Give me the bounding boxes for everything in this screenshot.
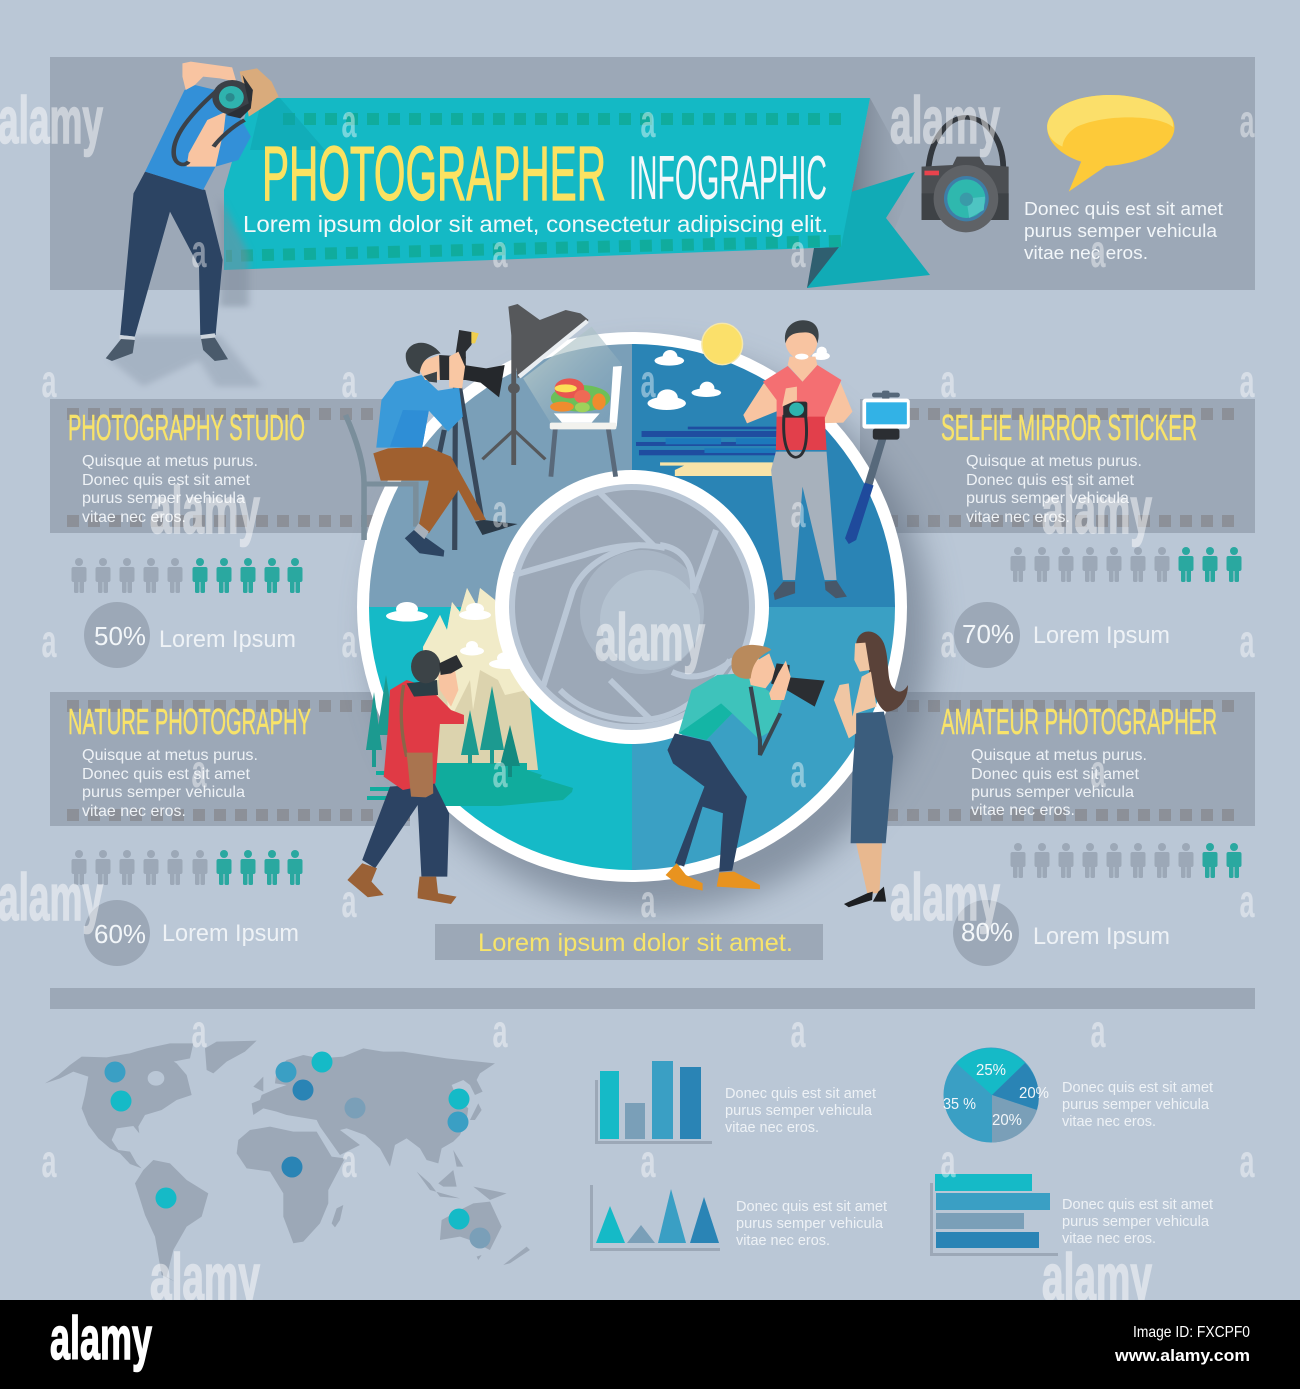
watermarks: alamy [890,83,1000,157]
section: nature photography: NATURE PHOTOGRAPHY [68,701,311,742]
section: selfie mirror sticker: Donec quis est sit amet [966,472,1135,489]
stat: 60%: 60% [94,919,146,949]
section: photography studio: Donec quis est sit amet [82,472,251,489]
stat: 50%: 50% [94,621,146,651]
watermarks: a [42,615,57,667]
icon: selfie stick with phone [845,391,910,544]
pie chart [943,1048,1049,1142]
section: photography studio: vitae nec eros. [82,509,186,526]
bar chart caption: Donec quis est sit amet [725,1086,876,1102]
pie chart: 35 % [943,1096,976,1113]
watermarks: alamy [0,83,103,157]
section: amateur photographer: Donec quis est sit amet [971,766,1140,783]
section: photography studio: Quisque at metus purus. [82,453,258,470]
watermarks: a [790,1005,806,1057]
pictogram row: 80% [1010,843,1242,878]
triangle chart caption [736,1199,887,1249]
panel: photography studio band [50,399,410,533]
panel: nature photography band [50,692,410,826]
lens aperture [495,470,769,744]
pie chart: 25% [976,1062,1006,1079]
watermarks: alamy [595,600,705,674]
pie chart caption: purus semper vehicula [1062,1097,1210,1113]
watermarks: alamy [0,860,103,934]
title: PHOTOGRAPHER [262,131,606,217]
figure: seated studio photographer [346,330,518,557]
horizontal bar chart caption: vitae nec eros. [1062,1231,1156,1247]
scene: mountains [367,588,573,806]
caption bar: Lorem ipsum dolor sit amet. [478,929,793,957]
header note: vitae nec eros. [1024,242,1148,263]
stat: 50% [84,602,296,668]
donut shadow [372,352,932,912]
triangle chart caption: vitae nec eros. [736,1233,830,1249]
triangle chart caption: Donec quis est sit amet [736,1199,887,1215]
section: nature photography: Donec quis est sit amet [82,766,251,783]
section: selfie mirror sticker [941,407,1197,526]
icon: dslr camera [922,117,1009,232]
bar chart caption [725,1086,876,1136]
section: selfie mirror sticker: Quisque at metus purus. [966,453,1142,470]
pie chart caption [1062,1080,1213,1130]
section: nature photography [68,701,311,820]
footer bar: alamy [50,1305,152,1372]
caption bar [435,924,823,960]
section: photography studio: PHOTOGRAPHY STUDIO [68,407,305,448]
bar chart [595,1061,712,1144]
header band [50,57,1255,290]
watermarks: alamy [890,860,1000,934]
horizontal bar chart caption: Donec quis est sit amet [1062,1197,1213,1213]
pictogram row: 50% [72,558,302,593]
scene: beach [636,323,830,476]
watermarks: alamy [150,1240,260,1314]
watermarks: a [640,1135,656,1187]
bar chart caption: purus semper vehicula [725,1103,873,1119]
section: photography studio [68,407,305,526]
horizontal bar chart caption: purus semper vehicula [1062,1214,1210,1230]
figure: nature photographer [347,650,464,904]
horizontal bar chart [930,1174,1058,1256]
watermarks: a [492,225,508,277]
stat: 80%: 80% [961,917,1013,947]
watermarks: a [1090,225,1106,277]
section: nature photography: purus semper vehicula [82,784,245,801]
watermarks: a [790,225,806,277]
world map [45,1041,530,1282]
bar chart caption: vitae nec eros. [725,1120,819,1136]
pictogram row: 60% [72,850,302,885]
watermarks: a [192,745,207,797]
footer bar [0,1300,1300,1389]
stat: 80% [953,900,1170,966]
figure: woman posing [834,631,908,907]
watermarks: a [790,485,806,537]
watermarks: a [1090,745,1106,797]
donut chart [357,332,907,882]
watermarks: a [1240,1135,1255,1187]
watermarks: a [342,875,357,927]
watermarks: a [492,485,508,537]
divider bar [50,988,1255,1009]
section: amateur photographer: vitae nec eros. [971,802,1075,819]
header note: purus semper vehicula [1024,220,1218,241]
header note: Donec quis est sit amet [1024,198,1223,219]
section: amateur photographer: purus semper vehicula [971,784,1134,801]
panel: selfie mirror sticker band [860,399,1255,533]
triangle chart [590,1185,720,1251]
section: selfie mirror sticker: vitae nec eros. [966,509,1070,526]
watermarks: a [342,355,357,407]
figure: selfie photographer [743,320,852,600]
pie chart: 20% [1019,1085,1049,1102]
section: nature photography: Quisque at metus purus. [82,747,258,764]
watermarks: a [640,875,656,927]
header note [1024,198,1223,263]
figure: studio set with lamp and food [482,304,622,477]
watermarks: a [790,745,806,797]
subtitle: Lorem ipsum dolor sit amet, consectetur adipiscing elit. [243,211,828,237]
footer bar: www.alamy.com [1114,1346,1250,1365]
pie chart: 20% [992,1112,1022,1129]
trees over the ring [366,675,395,767]
watermarks: alamy [1042,1240,1152,1314]
watermarks: a [192,1005,207,1057]
triangle chart caption: purus semper vehicula [736,1216,884,1232]
text: INFOGRAPHIC [629,144,827,213]
watermarks: a [342,95,357,147]
watermarks: alamy [150,473,260,547]
watermarks: a [940,355,956,407]
stat: 70%: Lorem Ipsum [1033,622,1170,649]
watermarks: alamy [1042,473,1152,547]
watermarks: a [342,1135,357,1187]
watermarks: a [640,355,656,407]
icon: sun [702,323,743,365]
stat: 60%: Lorem Ipsum [162,920,299,947]
pie chart caption: Donec quis est sit amet [1062,1080,1213,1096]
icon: speech bubble [1047,95,1174,192]
figure: standing photographer [106,62,279,387]
stat: 80%: Lorem Ipsum [1033,923,1170,950]
section: selfie mirror sticker: purus semper vehicula [966,490,1129,507]
footer bar: Image ID: FXCPF0 [1133,1324,1250,1341]
figure: amateur photographer [666,645,825,891]
watermarks: a [1090,1005,1106,1057]
pictogram row: 70% [1010,547,1242,582]
watermarks: a [492,1005,508,1057]
watermarks: a [1240,615,1255,667]
watermarks: a [1240,875,1255,927]
section: photography studio: purus semper vehicula [82,490,245,507]
watermarks: a [342,615,357,667]
stat: 50%: Lorem Ipsum [159,626,296,653]
panel: amateur photographer band [860,692,1255,826]
stat: 70%: 70% [962,619,1014,649]
watermarks: a [42,355,57,407]
watermarks: a [640,95,656,147]
stat: 70% [954,602,1170,668]
section: amateur photographer: Quisque at metus purus. [971,747,1147,764]
section: nature photography: vitae nec eros. [82,803,186,820]
stat: 60% [84,900,299,966]
watermarks: a [492,745,508,797]
section: amateur photographer [941,701,1217,819]
watermarks: a [192,225,207,277]
watermarks: a [940,615,956,667]
watermarks: a [42,1135,57,1187]
pie chart caption: vitae nec eros. [1062,1114,1156,1130]
horizontal bar chart caption [1062,1197,1213,1247]
watermarks: a [1240,355,1255,407]
watermarks: a [1240,95,1255,147]
watermarks: a [940,1135,956,1187]
title ribbon [224,98,930,288]
